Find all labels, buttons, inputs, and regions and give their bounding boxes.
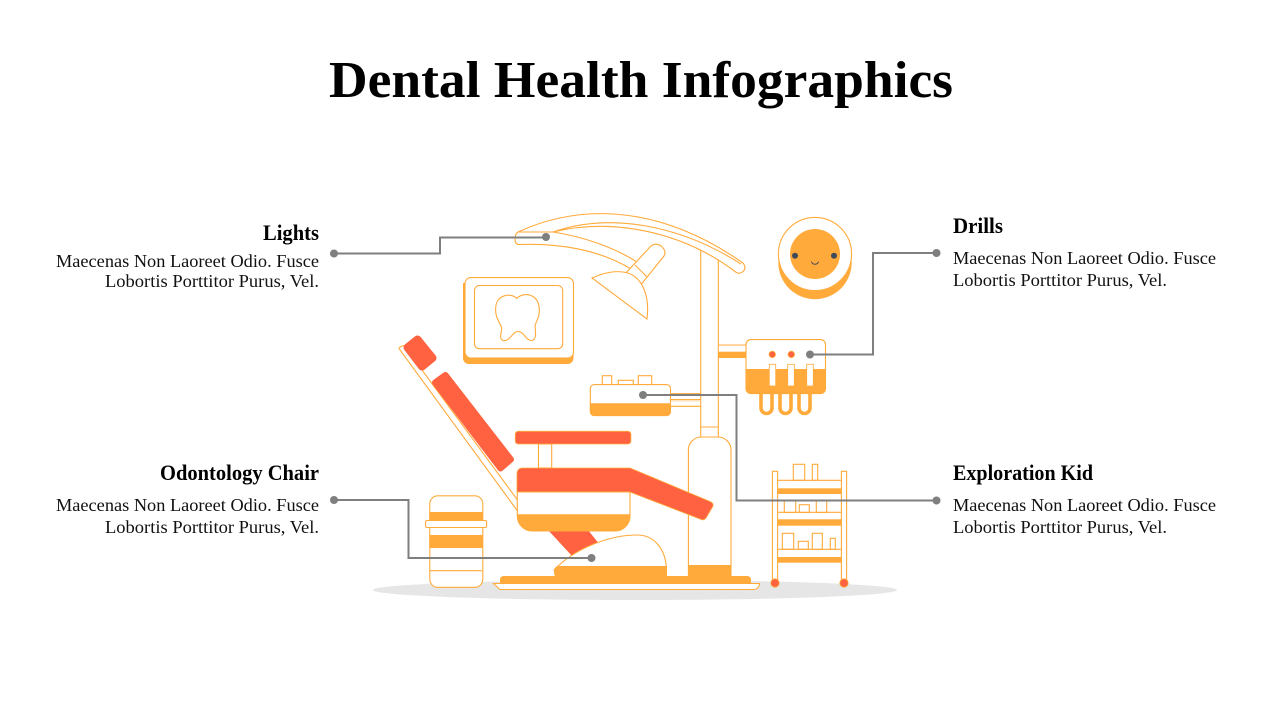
exploration kit cart <box>771 464 848 587</box>
icon: tooth <box>496 295 539 341</box>
text block: drills: Drills <box>953 213 1003 238</box>
text block: lights: Maecenas Non Laoreet Odio. Fusce <box>56 251 319 271</box>
cart shelves <box>778 480 841 549</box>
lamp head <box>592 244 665 319</box>
connector: exploration kit <box>639 391 940 504</box>
text block: odontology chair: Lobortis Porttitor Purus, Vel. <box>105 517 319 537</box>
text block: lights: Lights <box>263 220 319 245</box>
text block: odontology chair: Odontology Chair <box>160 460 319 485</box>
cart wheels <box>771 579 779 587</box>
headrest <box>408 340 432 366</box>
text block: exploration kid: Maecenas Non Laoreet Odio. Fusce <box>953 495 1216 515</box>
text block: exploration kid: Exploration Kid <box>953 460 1093 485</box>
backrest cushion <box>435 375 511 468</box>
overhead lamp arm <box>515 214 745 273</box>
text block: lights: Lobortis Porttitor Purus, Vel. <box>105 271 319 291</box>
chair lift post <box>548 530 600 556</box>
text block: drills <box>953 213 1216 290</box>
connector: drills <box>806 249 940 358</box>
control unit <box>590 376 671 416</box>
seat base <box>517 492 630 531</box>
text block: lights <box>56 220 319 291</box>
text block: drills: Maecenas Non Laoreet Odio. Fusce <box>953 248 1216 268</box>
supply canister <box>426 496 487 587</box>
text block: exploration kid <box>953 460 1216 537</box>
base dome <box>554 535 666 570</box>
cart posts <box>772 471 778 580</box>
text block: odontology chair <box>56 460 319 537</box>
instrument column <box>688 245 731 577</box>
x-ray monitor <box>463 278 574 364</box>
title: Dental Health Infographics <box>329 52 953 109</box>
text block: exploration kid: Lobortis Porttitor Purus, Vel. <box>953 517 1167 537</box>
connector: lights <box>330 233 550 258</box>
dentist chair <box>399 340 760 590</box>
backrest frame <box>399 346 518 511</box>
lamp sphere with face <box>778 217 852 299</box>
armrest post <box>538 444 552 468</box>
seat cushion <box>517 468 713 520</box>
drill holder <box>746 340 826 414</box>
illustration: dental clinic <box>373 214 897 600</box>
text block: odontology chair: Maecenas Non Laoreet Odio. Fusce <box>56 495 319 515</box>
text block: drills: Lobortis Porttitor Purus, Vel. <box>953 270 1167 290</box>
cart top shelf items <box>793 464 805 480</box>
cart middle shelf items <box>784 500 796 512</box>
armrest <box>515 431 631 444</box>
connector: odontology chair <box>330 496 596 562</box>
chair base platform <box>494 584 760 590</box>
floor shadow <box>373 580 897 600</box>
unit connector arms <box>671 345 746 406</box>
cart bottom shelf items <box>782 533 794 549</box>
